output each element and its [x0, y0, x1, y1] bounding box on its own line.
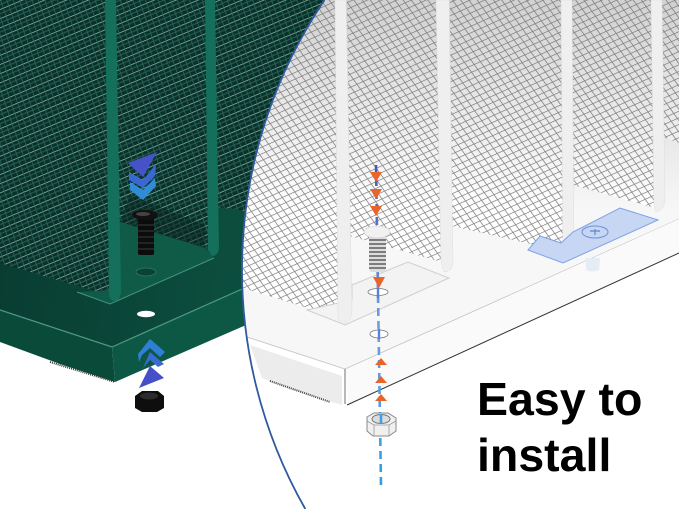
line-art bolt: [364, 226, 390, 272]
heading: Easy to install: install: [477, 429, 611, 481]
green mounting foot plate: [77, 222, 214, 304]
line-art hex nut: [367, 413, 396, 436]
white wire mesh panels: [240, 0, 679, 318]
white upright posts: [335, 0, 665, 324]
panel: white line-art organizer close-up: [240, 0, 679, 509]
icon: orange up arrows: [375, 358, 387, 401]
green base plate: [0, 205, 340, 382]
heading: Easy to install: Easy to: [477, 373, 642, 425]
icon: black bolt: [132, 210, 158, 255]
icon: down arrows: [128, 152, 157, 200]
plate holes: [136, 268, 156, 317]
white foot plates: [307, 262, 449, 325]
blue highlighted foot plate with screw: [528, 208, 658, 272]
white base plate: [248, 218, 679, 406]
icon: orange down arrows: [370, 172, 385, 288]
icon: up arrows: [138, 339, 165, 388]
assembly dashed axis line: [376, 165, 381, 485]
white background of lens: [242, 0, 679, 509]
green upright posts: [105, 0, 219, 301]
line-art washer holes: [368, 288, 388, 339]
blue arc divider: [242, 0, 324, 509]
heading: Easy to install: [477, 373, 642, 481]
panel: green organizer close-up: [0, 0, 340, 412]
green wire mesh panels: [0, 0, 340, 296]
icon: black nut: [135, 391, 164, 412]
